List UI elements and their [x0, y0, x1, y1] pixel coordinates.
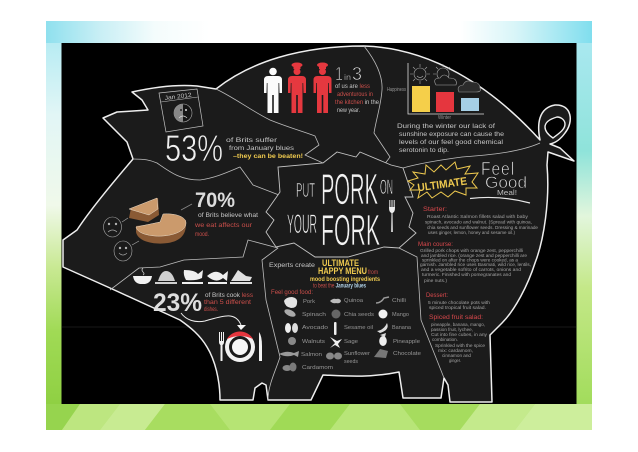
bar chart	[387, 63, 484, 121]
icon: fish plate	[207, 271, 228, 284]
chart: pie	[129, 198, 186, 244]
bar chart: Winter	[438, 115, 451, 121]
panel: january blues	[159, 89, 303, 169]
text: less adventurous: the kitchen in the	[335, 100, 380, 106]
heading: spiced fruit salad: Spiced fruit salad:	[429, 314, 483, 321]
text: left column foods: Walnuts	[302, 339, 325, 345]
text: middle column foods: Sage	[344, 339, 358, 345]
text: experts create: to beat the January blues	[313, 284, 366, 290]
icon: red chef	[288, 62, 306, 113]
panel: centre title: ON	[380, 176, 393, 199]
text: right column foods: Pineapple	[393, 339, 420, 345]
text: mood	[194, 213, 258, 238]
text: right column foods: Chocolate	[393, 351, 421, 357]
icon: calendar	[159, 89, 203, 132]
heading: feel good meal: Feel	[481, 159, 515, 179]
text: fewer dishes: than 5 different	[204, 300, 251, 306]
arrow	[181, 313, 246, 330]
black chalkboard	[62, 43, 576, 404]
text: middle column foods: Sesame oil	[344, 325, 373, 331]
icon: cloud	[458, 81, 480, 92]
icon: spaghetti plate	[155, 271, 177, 284]
statistic: 1 in 3: 1	[335, 64, 343, 84]
icon: sad face	[104, 217, 128, 237]
text: experts create: HAPPY MENU	[318, 266, 367, 276]
text: experts create: ULTIMATE	[322, 258, 359, 268]
statistic: 1 in 3: 3	[352, 64, 362, 84]
text: fewer dishes: of Brits cook less	[205, 293, 253, 299]
text: dessert	[428, 300, 490, 310]
text: serotonin	[397, 124, 505, 154]
panel: one in three	[264, 62, 380, 114]
text: left column foods: Pork	[303, 299, 315, 305]
statistic: 23%: 23%	[153, 289, 202, 317]
statistic: 1 in 3: in	[344, 73, 351, 82]
statistic: 70%: 70%	[195, 189, 235, 212]
text: spiced fruit salad	[431, 322, 488, 363]
pig silhouette	[63, 46, 574, 402]
icon: plate with cutlery	[219, 331, 262, 362]
text: january blues: –they can be beaten!	[233, 154, 303, 160]
heading: feel good meal	[470, 159, 530, 203]
icon: roast chicken	[182, 270, 203, 284]
text: main course: turmeric. Finished with pomegranates and	[422, 272, 511, 277]
text: serotonin: During the winter our lack of	[397, 124, 495, 130]
statistic: 53%: 53%	[165, 128, 223, 169]
text: main course: and jambled rice. (orange zest and pepperchilli are	[421, 253, 527, 258]
heading: main course: Main course:	[418, 241, 453, 248]
text: left column foods: Avocado	[302, 325, 328, 331]
text: spiced fruit salad: Sprinkled with the spice	[435, 343, 485, 348]
text: spiced fruit salad: mix: cardamom,	[438, 348, 473, 353]
text: january blues: of Brits suffer	[226, 138, 277, 144]
text: spiced fruit salad: ginger.	[449, 358, 461, 363]
text: spiced fruit salad: pineapple, banana, mango,	[431, 322, 485, 327]
text: serotonin: sunshine exposure can cause the	[399, 132, 505, 138]
text: left column foods	[301, 299, 333, 371]
text: main course: Grilled pork chops with orange zest, pepperchilli	[420, 248, 523, 253]
text: left column foods: Salmon	[301, 352, 322, 358]
text: less adventurous: of us are less	[335, 84, 370, 90]
badge: ultimate	[408, 162, 478, 198]
panel: ultimate feel good meal	[408, 159, 538, 363]
text: mood: we eat affects our	[194, 223, 252, 229]
text: main course: garnish. Jambled rice uses Basmati, wild rice, lentils,	[420, 262, 531, 267]
text: mood: of Brits believe what	[198, 213, 258, 219]
icon: calendar: Jan 2012	[165, 93, 193, 102]
text: january blues: from January blues	[229, 146, 294, 152]
text: less adventurous: new year.	[337, 108, 360, 114]
title: put pork on your fork: FORK	[321, 206, 380, 255]
heading: feel good meal: Meal!	[497, 190, 517, 197]
panel: mood and food	[104, 189, 258, 261]
heading: feel good meal: Good	[485, 173, 527, 192]
text: middle column foods: Chia seeds	[344, 312, 374, 318]
text: starter: Roast Atlantic Salmon fillets salad with baby	[427, 214, 529, 219]
text: starter: spinach, avocado and walnut. (Spread with quinoa,	[425, 220, 532, 224]
icon: fork	[389, 200, 395, 232]
text: main course: sprinkled on after the chops were cooked, as a	[422, 258, 518, 262]
title: put pork on your fork: YOUR	[287, 209, 317, 239]
text: middle column foods: Quinoa	[344, 298, 364, 304]
panel: variety of dishes	[133, 268, 262, 362]
slide background	[46, 21, 592, 430]
text: main course: and a vegetable sofrito of carrots, onions and	[421, 267, 521, 272]
text: dessert: 5 minute chocolate pots with	[428, 300, 490, 305]
text: starter	[425, 214, 538, 235]
icons: middle column foods	[326, 299, 342, 360]
text: main course: pine nuts.)	[424, 278, 448, 283]
badge: ultimate: ULTIMATE	[417, 176, 468, 194]
text: main course	[420, 248, 531, 283]
text: experts create	[269, 258, 381, 290]
icons: left column foods	[279, 297, 299, 372]
statistic: 1 in 3	[335, 64, 362, 84]
icon: soup bowl	[133, 268, 152, 284]
icon: white person	[264, 68, 282, 113]
text: middle column foods: Sunflower	[344, 351, 370, 357]
text: right column foods	[392, 298, 421, 357]
text: dessert: spiced tropical fruit salad.	[429, 305, 486, 310]
text: starter: chia seeds and sunflower seeds. Dressing & marinade	[427, 225, 538, 230]
icon: dish	[230, 270, 252, 284]
bar chart: Happiness	[387, 87, 406, 93]
heading: dessert: Dessert:	[426, 292, 448, 299]
text: experts create: Experts create	[269, 263, 316, 269]
text: left column foods: Cardamom	[302, 365, 333, 371]
text: january blues	[226, 138, 303, 160]
text: fewer dishes	[204, 293, 253, 313]
heading: feel good food: Feel good food:	[271, 290, 313, 296]
text: spiced fruit salad: cinnamon and	[442, 353, 471, 358]
icons: right column foods	[374, 297, 389, 358]
heading: starter: Starter:	[423, 206, 447, 213]
text: less adventurous: adventurous in	[337, 92, 373, 98]
text: left column foods: Spinach	[302, 312, 326, 318]
panel: ultimate happy menu	[269, 258, 421, 372]
text: experts create: from	[368, 270, 378, 276]
title: put pork on your fork	[287, 165, 393, 255]
icon: happy face	[114, 241, 139, 261]
text: middle column foods: seeds	[344, 359, 358, 365]
icon: sun	[410, 64, 430, 84]
text: right column foods: Mango	[392, 312, 409, 318]
title: put pork on your fork: PORK	[321, 165, 378, 214]
text: spiced fruit salad: combination.	[432, 337, 458, 342]
text: right column foods: Banana	[392, 325, 412, 331]
title: put pork on your fork: PUT	[296, 180, 315, 202]
text: spiced fruit salad: passion fruit, lychee,	[431, 327, 473, 332]
icon: red chef	[314, 62, 332, 113]
text: fewer dishes: dishes.	[204, 307, 218, 313]
text: mood: mood.	[195, 232, 209, 238]
text: right column foods: Chilli	[392, 298, 406, 304]
text: experts create: mood boosting ingredients	[310, 277, 381, 283]
section dividers	[110, 46, 540, 400]
text: middle column foods	[344, 298, 374, 365]
text: less adventurous	[335, 84, 380, 114]
tail loop	[545, 117, 565, 138]
panel: centre title	[266, 152, 416, 257]
text: spiced fruit salad: Cut into fine cubes, in any	[431, 332, 488, 337]
text: serotonin: serotonin to dip.	[399, 148, 449, 154]
text: starter: uses ginger, lemon, honey and sesame oil.)	[428, 230, 515, 235]
icon: sun behind cloud	[433, 64, 456, 85]
text: serotonin: levels of our feel good chemical	[399, 140, 503, 146]
panel: winter happiness chart	[387, 63, 505, 154]
